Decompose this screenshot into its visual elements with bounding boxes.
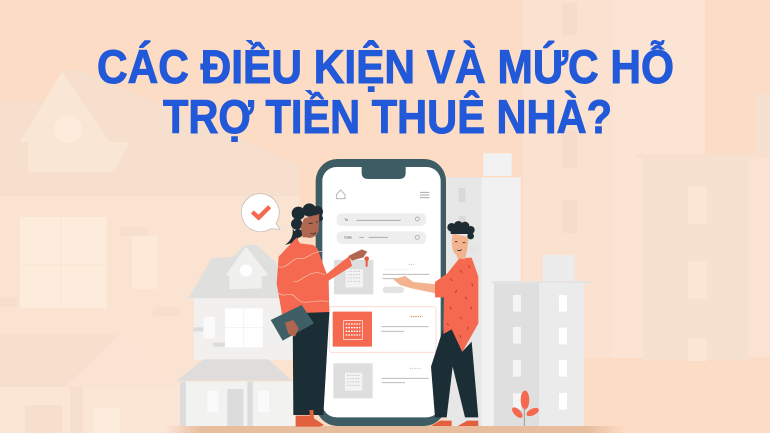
search bar: to: To: [344, 218, 348, 222]
hair: [447, 221, 475, 239]
shoes: [431, 421, 478, 426]
icon: menu: [420, 192, 429, 198]
folder: [271, 305, 314, 341]
icon: speech bubble with check: [241, 194, 280, 232]
trousers: [431, 328, 478, 417]
grey house: [177, 245, 297, 426]
listing card 3: [333, 363, 429, 398]
face: [301, 214, 319, 238]
ground: [165, 426, 625, 433]
search bar: to: [337, 213, 426, 226]
title: CÁC ĐIỀU KIỆN VÀ MỨC HỖ: [97, 40, 674, 93]
listing card 1: [334, 260, 429, 294]
man in patterned shirt: [393, 221, 478, 426]
trousers: [293, 312, 329, 415]
icon: plant: [510, 391, 540, 426]
woman with key: [271, 203, 369, 427]
faded house background: [0, 70, 300, 433]
face details: [309, 222, 318, 234]
title: [97, 40, 674, 143]
icon: home: [336, 190, 345, 199]
shoes: [296, 410, 324, 427]
sweater stripes: [278, 251, 329, 302]
neck and face: [452, 233, 469, 259]
hair: [285, 203, 323, 245]
faded buildings background right: [523, 0, 770, 361]
search bar: date: [337, 231, 426, 244]
listing card 2 highlighted: [329, 307, 436, 352]
shirt: [435, 258, 478, 352]
face details: [455, 242, 465, 251]
icon: key: [364, 257, 370, 267]
title: TRỢ TIỀN THUÊ NHÀ?: [163, 90, 612, 143]
grey apartment buildings: [447, 153, 592, 426]
arm and hand: [393, 276, 437, 294]
earring: [470, 246, 475, 251]
shirt pattern: [447, 265, 473, 338]
sweater: [277, 237, 352, 322]
key head: [364, 256, 369, 261]
phone: [316, 159, 446, 426]
hands: [285, 249, 367, 337]
search bar: date: Date: [344, 235, 352, 239]
